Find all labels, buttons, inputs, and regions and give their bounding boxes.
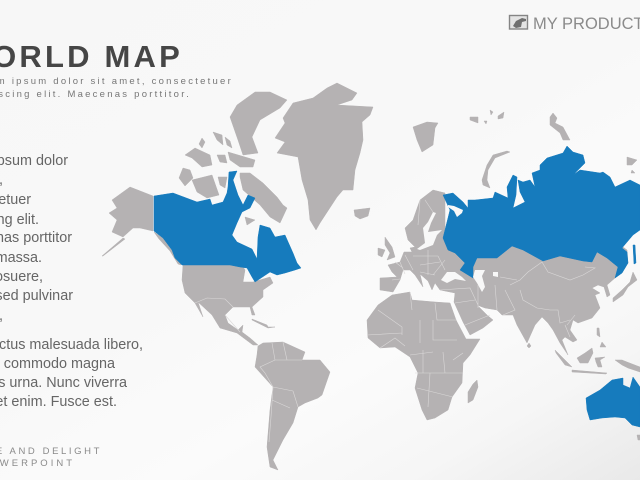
world map	[102, 83, 640, 470]
map: North America gray	[102, 187, 275, 345]
logo icon	[510, 16, 528, 29]
map: Africa	[367, 292, 480, 420]
map: Eurasia gray	[378, 190, 640, 374]
map: country borders	[367, 292, 463, 407]
map: Svalbard and Arctic Russia islands	[413, 110, 637, 188]
map: South America	[255, 342, 330, 470]
map: Arctic islands	[179, 92, 287, 225]
map: Canada	[154, 171, 301, 282]
map: Iceland	[354, 208, 370, 219]
map: Madagascar	[468, 380, 478, 403]
map: Sakhalin	[633, 245, 636, 264]
map: Australia	[586, 377, 640, 427]
subtitle	[0, 76, 233, 100]
map: Greenland	[275, 83, 373, 230]
footer tagline	[0, 446, 102, 469]
map: Russia	[443, 146, 640, 278]
map: Tasmania	[637, 435, 640, 440]
map: inland seas	[417, 205, 498, 292]
body text	[0, 153, 143, 410]
